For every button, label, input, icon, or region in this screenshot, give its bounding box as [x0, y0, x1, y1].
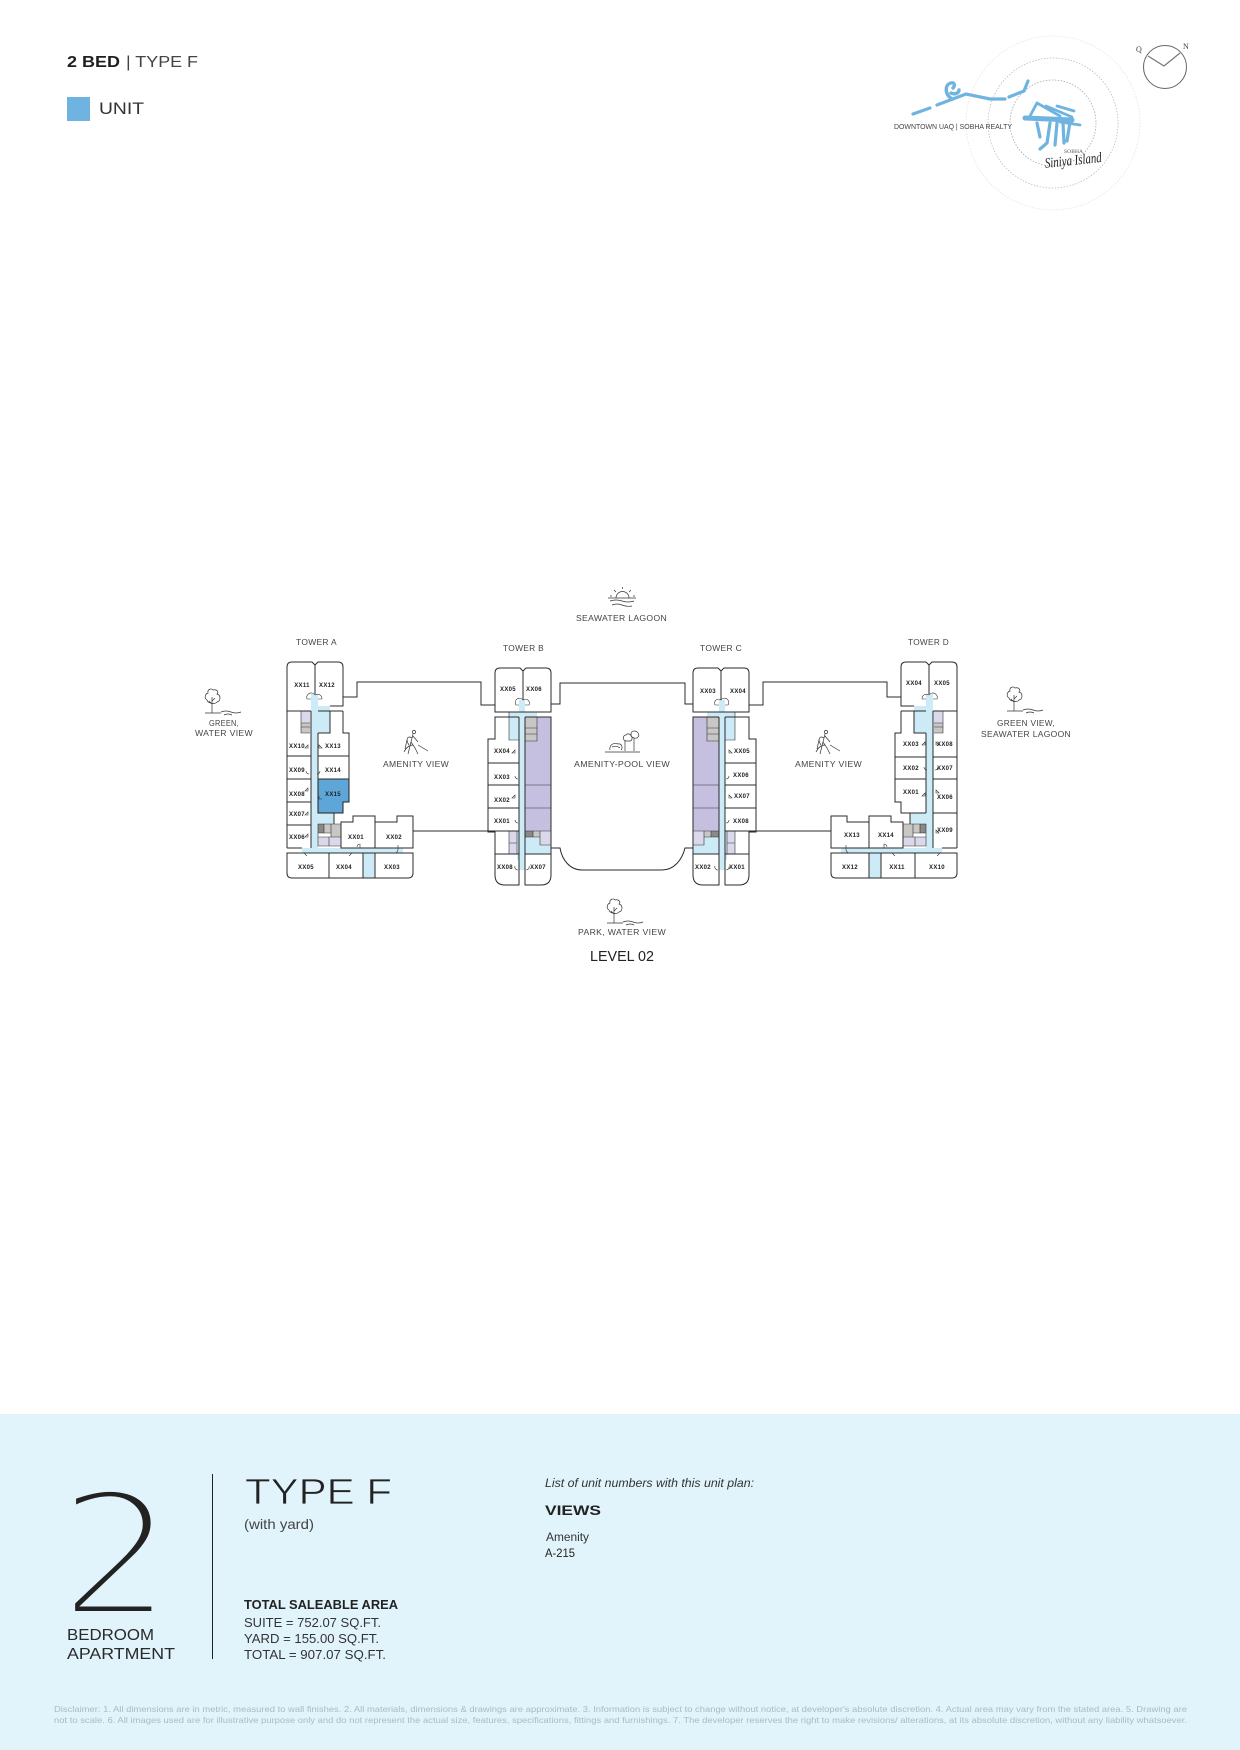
saleable area [244, 1598, 398, 1662]
tower B unit labels: XX02 [494, 798, 510, 804]
tower D unit labels: XX02 [903, 766, 919, 772]
courtyard outlines [343, 682, 901, 870]
bottom information panel [0, 1414, 1240, 1750]
tower D unit labels: XX08 [937, 742, 953, 748]
tower A unit labels: XX06 [289, 835, 305, 841]
saleable area: TOTAL SALEABLE AREA [244, 1598, 398, 1612]
tower B unit labels: XX05 [500, 687, 516, 693]
tower D unit labels: XX10 [929, 865, 945, 871]
tower A unit labels [289, 683, 402, 871]
bedroom count numeral: 2 [56, 1455, 176, 1657]
tower D unit labels: XX06 [937, 795, 953, 801]
bedroom apartment label: APARTMENT [67, 1646, 175, 1663]
disclaimer: Disclaimer: 1. All dimensions are in metric, measured to wall finishes. 2. All materials, dimensions & drawings are approximate. 3. Information is subject to change without notice, at developer's absolute discretion. 4. Actual area may vary from the stated area. 5. Drawing are [54, 1704, 1187, 1714]
tower A plan [287, 662, 413, 878]
tower D unit labels: XX05 [934, 681, 950, 687]
tower B unit labels: XX03 [494, 775, 510, 781]
label: amenity pool view: AMENITY-POOL VIEW [574, 760, 670, 769]
label: amenity view left: AMENITY VIEW [383, 760, 449, 769]
label: amenity view right: AMENITY VIEW [795, 760, 862, 769]
tower C unit labels: XX02 [695, 865, 711, 871]
tower A unit labels: XX12 [319, 683, 335, 689]
tower C plan [693, 668, 756, 885]
legend: unit [67, 97, 144, 121]
tower D unit labels: XX12 [842, 865, 858, 871]
label: level 02: LEVEL 02 [590, 949, 654, 965]
tower B unit labels: XX01 [494, 819, 510, 825]
label: green, water view: GREEN, [209, 719, 239, 728]
tower A unit labels: XX03 [384, 865, 400, 871]
tower D unit labels [842, 681, 953, 871]
bedroom apartment label: BEDROOM [67, 1627, 154, 1644]
tower B unit labels: XX04 [494, 749, 510, 755]
header: plan title: 2 BED [67, 54, 120, 71]
tower D unit labels: XX07 [937, 766, 953, 772]
tower B unit labels: XX07 [530, 865, 546, 871]
unit number list: VIEWS [545, 1502, 601, 1518]
tower B unit labels: XX08 [497, 865, 513, 871]
tower C unit labels [695, 689, 750, 871]
tower C unit labels: XX06 [733, 773, 749, 779]
tower A unit labels: XX09 [289, 768, 305, 774]
unit number list: A-215 [545, 1548, 575, 1560]
label: green, water view [195, 719, 253, 738]
unit number list [545, 1476, 754, 1560]
tower A unit labels: XX01 [348, 835, 364, 841]
icon: seawater lagoon sunset [608, 587, 636, 606]
label: green view, seawater lagoon: GREEN VIEW, [997, 719, 1055, 728]
compass [1136, 42, 1189, 88]
key map: location circles and islands [913, 36, 1140, 210]
tower A unit labels: XX13 [325, 744, 341, 750]
label: seawater lagoon: SEAWATER LAGOON [576, 614, 667, 623]
tower A unit labels: XX05 [298, 865, 314, 871]
tower D unit labels: XX09 [937, 828, 953, 834]
tower A unit labels: XX11 [294, 683, 310, 689]
compass: Q [1136, 45, 1142, 54]
unit number list: List of unit numbers with this unit plan: [545, 1476, 754, 1490]
icon: green water view left [205, 689, 241, 715]
label: park water view: PARK, WATER VIEW [578, 928, 666, 937]
with yard note: (with yard) [244, 1516, 314, 1532]
legend: unit: UNIT [99, 100, 144, 118]
tower C unit labels: XX01 [729, 865, 745, 871]
tower labels: TOWER C [700, 644, 742, 653]
icon: amenity figure right [816, 730, 840, 754]
tower C unit labels: XX05 [734, 749, 750, 755]
icon: amenity pool trees [605, 731, 640, 752]
highlighted unit XX15 [318, 779, 349, 813]
tower labels: TOWER B [503, 644, 544, 653]
tower C unit labels: XX08 [733, 819, 749, 825]
tower A unit labels: XX14 [325, 768, 341, 774]
tower D unit labels: XX03 [903, 742, 919, 748]
tower A unit labels: XX02 [386, 835, 402, 841]
tower A unit labels: XX08 [289, 792, 305, 798]
key plan: level 02 [195, 587, 1071, 965]
header: plan title: | TYPE F [126, 54, 198, 71]
tower labels: TOWER D [908, 638, 949, 647]
saleable area: YARD = 155.00 SQ.FT. [244, 1632, 379, 1646]
saleable area: TOTAL = 907.07 SQ.FT. [244, 1648, 386, 1662]
tower D plan [831, 662, 957, 878]
tower B plan [488, 668, 551, 885]
tower C unit labels: XX04 [730, 689, 746, 695]
tower D unit labels: XX01 [903, 790, 919, 796]
tower B unit labels [494, 687, 546, 871]
tower A unit labels: XX15 [325, 792, 341, 798]
disclaimer: not to scale. 6. All images used are for illustrative purpose only and do not represent the actual size, features, specifications, fittings and furnishings. 7. The developer reserves the right to make revisions/ alterations, at its absolute discretion, without any liability whatsoever. [54, 1715, 1187, 1725]
key map label: downtown: DOWNTOWN UAQ | SOBHA REALTY [894, 122, 1012, 131]
tower C unit labels: XX07 [734, 794, 750, 800]
icon: green view right [1007, 687, 1043, 713]
tower A unit labels: XX04 [336, 865, 352, 871]
tower D unit labels: XX04 [906, 681, 922, 687]
unit type heading: TYPE F [245, 1471, 392, 1512]
bedroom apartment label [67, 1627, 175, 1663]
unit number list: Amenity [546, 1532, 589, 1544]
label: green, water view: WATER VIEW [195, 729, 253, 738]
tower labels: TOWER A [296, 638, 337, 647]
disclaimer [54, 1704, 1187, 1725]
logo: Sobha Siniya Island: SOBHA [1064, 149, 1083, 155]
tower A unit labels: XX10 [289, 744, 305, 750]
icon: amenity figure left [404, 730, 428, 754]
label: green view, seawater lagoon [981, 719, 1071, 739]
vertical divider [212, 1474, 213, 1659]
header: plan title [67, 54, 198, 71]
icon: park water view [607, 899, 643, 925]
tower C unit labels: XX03 [700, 689, 716, 695]
tower D unit labels: XX13 [844, 833, 860, 839]
compass: N [1183, 42, 1189, 51]
tower D unit labels: XX11 [889, 865, 905, 871]
label: green view, seawater lagoon: SEAWATER LAGOON [981, 730, 1071, 739]
tower labels [296, 638, 949, 653]
saleable area: SUITE = 752.07 SQ.FT. [244, 1616, 381, 1630]
tower A unit labels: XX07 [289, 812, 305, 818]
tower B unit labels: XX06 [526, 687, 542, 693]
tower D unit labels: XX14 [878, 833, 894, 839]
logo: Sobha Siniya Island: Siniya Island [1044, 150, 1103, 172]
